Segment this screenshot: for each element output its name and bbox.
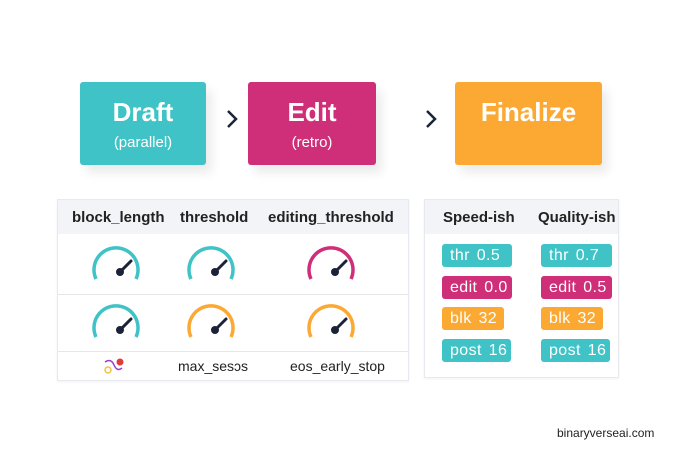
pills: thr 0.5	[450, 247, 500, 264]
header labels: editing_threshold	[268, 209, 394, 226]
box: Edit: (retro)	[292, 134, 332, 151]
pills	[442, 244, 612, 362]
box: Draft: Draft	[113, 97, 173, 127]
panel: parameters table	[57, 199, 409, 381]
pills: thr 0.7	[549, 247, 599, 264]
preset headers: Speed-ish	[443, 209, 515, 226]
gauges	[92, 246, 355, 374]
pills: edit 0.0	[450, 279, 508, 296]
pills: post 16	[450, 342, 507, 359]
box: Draft	[80, 82, 206, 165]
preset headers	[443, 209, 616, 226]
header labels: block_length	[72, 209, 165, 226]
box: Edit: Edit	[287, 97, 337, 127]
watermark: binaryverseai.com	[557, 426, 654, 440]
header labels: threshold	[180, 209, 248, 226]
bottom labels: max_sesɔs	[178, 358, 248, 374]
header labels	[72, 209, 394, 226]
bottom labels	[178, 358, 385, 374]
preset headers: Quality-ish	[538, 209, 616, 226]
box: Finalize	[455, 82, 602, 165]
arrow 1	[227, 110, 238, 128]
box: Draft: (parallel)	[114, 134, 172, 151]
pills: blk 32	[450, 310, 497, 327]
arrow 2	[426, 110, 437, 128]
box: Finalize: Finalize	[481, 97, 576, 127]
box: Edit	[248, 82, 376, 165]
pills: edit 0.5	[549, 279, 607, 296]
bottom labels: eos_early_stop	[290, 358, 385, 374]
pills: post 16	[549, 342, 606, 359]
pills: blk 32	[549, 310, 596, 327]
panel: presets	[424, 199, 619, 378]
